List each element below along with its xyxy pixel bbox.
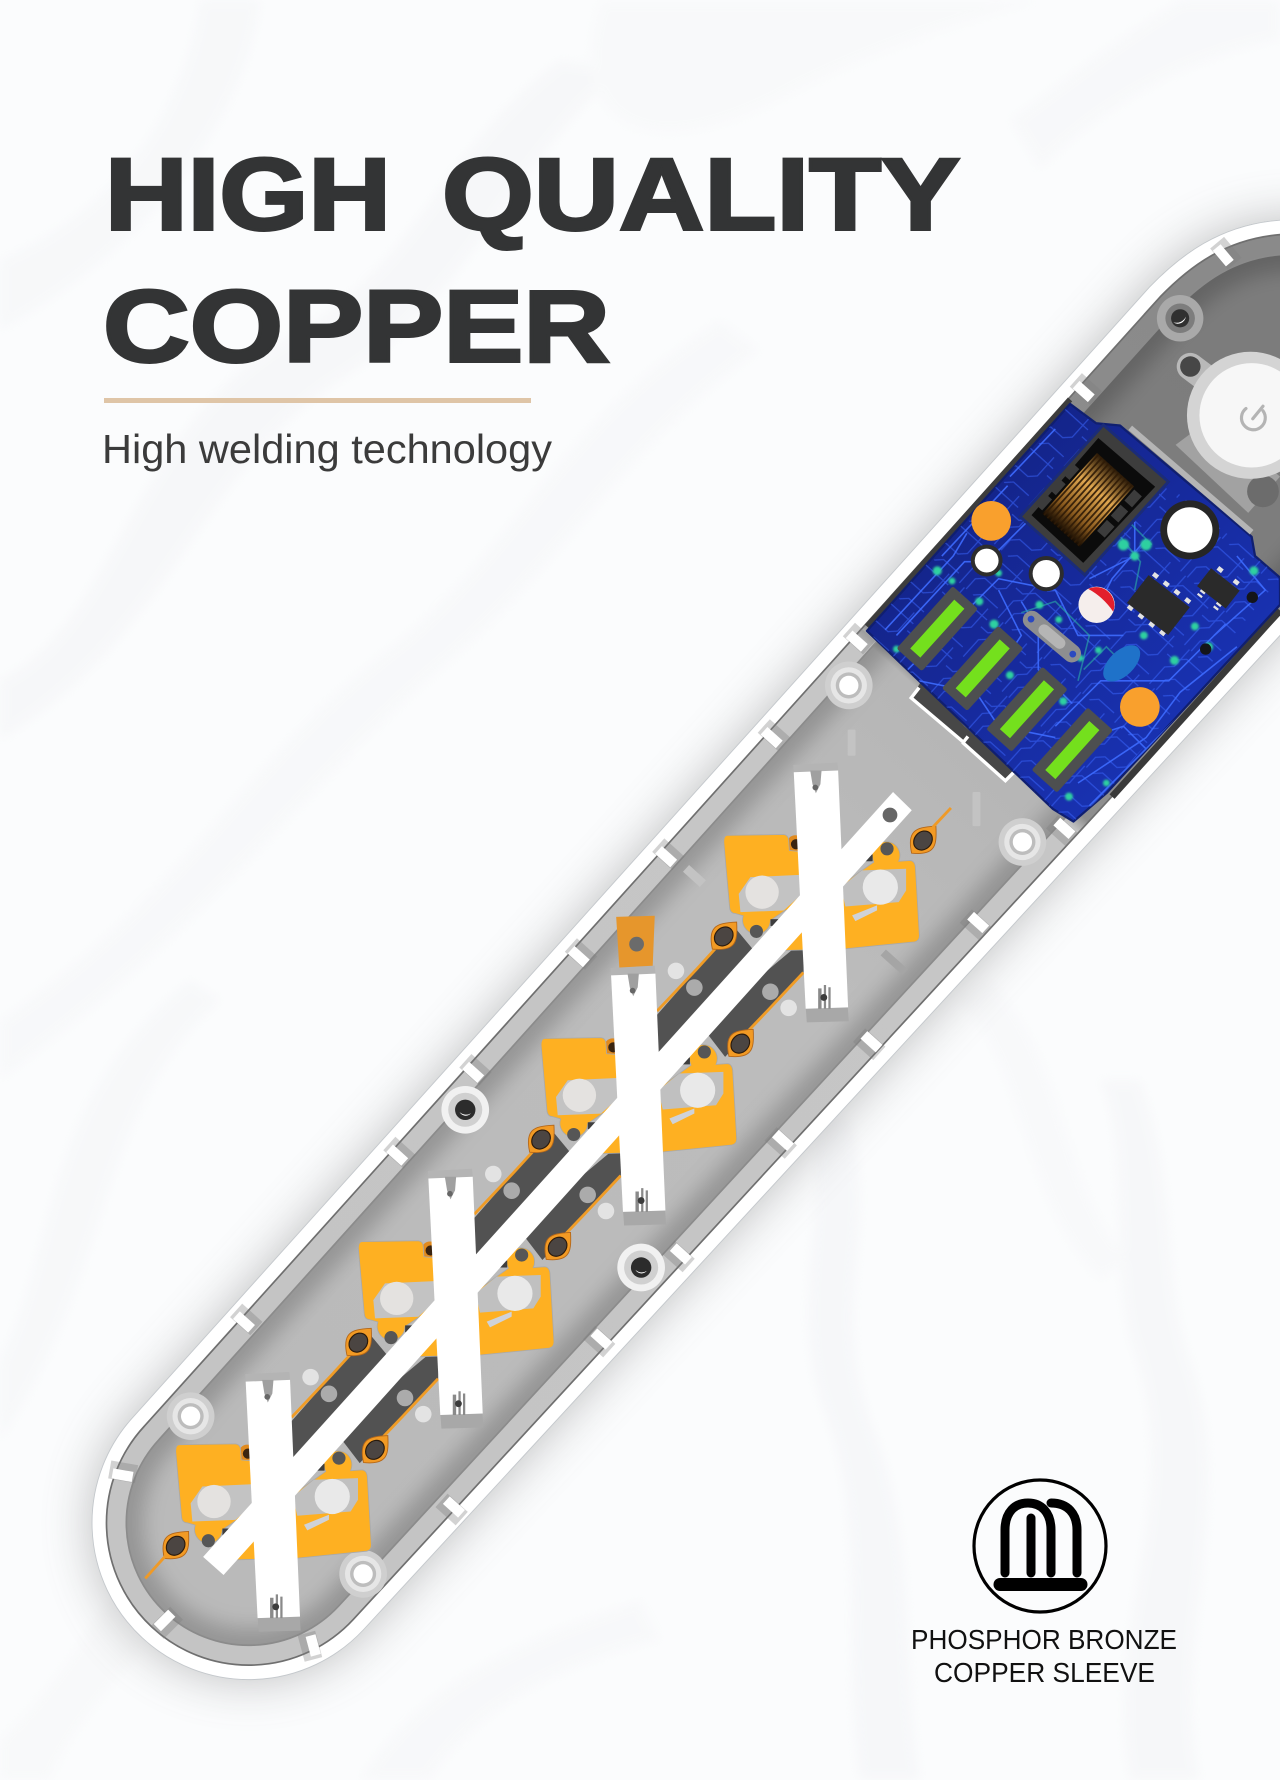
title: HIGH [105,138,391,252]
capacitors and components [971,500,1219,727]
title: QUALITY [442,138,960,252]
title: COPPER [103,270,610,384]
switch bracket and usb openings [867,399,1280,797]
socket block 1 [155,1427,397,1567]
vertical conductor strip 3 [610,966,666,1226]
usb ports [897,586,1113,793]
logo caption: PHOSPHOR BRONZE [911,1624,1177,1655]
strip casing [92,216,1280,1680]
board edge rail [1130,428,1252,532]
power strip product cutaway [92,216,1280,1680]
brass rails [291,927,806,1470]
subtitle: High welding technology [102,426,552,472]
vertical conductor strip 4 [793,763,849,1022]
printed circuit board [867,404,1280,822]
vertical conductor strip 2 [428,1169,483,1429]
ic chips [1123,563,1244,640]
transformer with copper coil [1020,425,1168,575]
icon: phosphor bronze sleeve logo [974,1480,1106,1612]
divider rule [104,398,531,403]
rear screw boss and lug [1157,295,1231,397]
strip shadow [92,216,1280,1680]
brass end tails [145,808,951,1578]
socket block 3 [520,1021,762,1161]
wall clips [108,237,1242,1662]
socket block 4 [703,818,945,957]
logo caption: COPPER SLEEVE [934,1657,1155,1688]
title [103,138,960,384]
socket block 2 [338,1224,580,1364]
screw posts [167,662,1046,1598]
long diagonal conductor strip [203,792,912,1575]
small grey posts [683,730,980,975]
power switch [1187,352,1280,479]
icon: power symbol [1241,406,1265,430]
orange terminal tab [616,916,655,971]
logo caption [911,1624,1177,1688]
vertical conductor strip 1 [245,1372,301,1632]
